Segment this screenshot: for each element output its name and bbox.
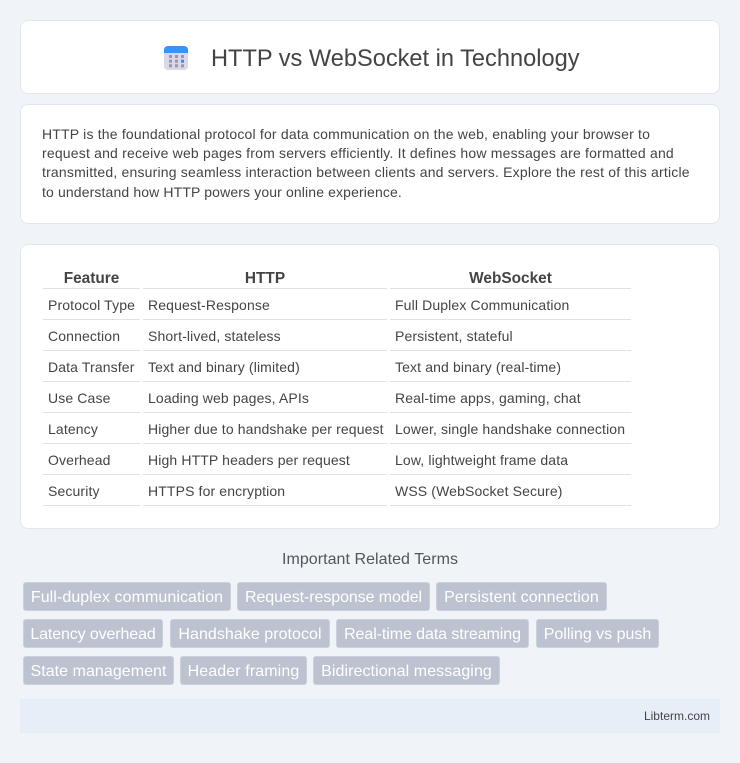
- tag list: related terms: Bidirectional messaging: [321, 663, 492, 680]
- text block: line 1: HTTP is the foundational protocol for data communication on the web, enabling your browser to: [42, 126, 650, 142]
- table row: latency: Lower, single handshake connection: [395, 421, 625, 437]
- table row: protocol type: Full Duplex Communication: [395, 297, 569, 313]
- table row: latency: Higher due to handshake per request: [148, 421, 384, 437]
- table row: use case: [48, 390, 581, 406]
- title: HTTP vs WebSocket in Technology: [211, 46, 580, 72]
- text block: line 2: request and receive web pages from servers efficiently. It defines how messages are formatted and: [42, 145, 674, 161]
- table row: connection: Connection: [48, 328, 120, 344]
- tag list: related terms: Request-response model: [245, 589, 422, 606]
- table row: data transfer: Data Transfer: [48, 359, 135, 375]
- tag list: related terms: Full-duplex communication: [31, 589, 223, 606]
- table row: connection: [48, 328, 513, 344]
- table row: overhead: [48, 452, 568, 468]
- table row: protocol type: Protocol Type: [48, 297, 135, 313]
- table row: protocol type: Request-Response: [148, 297, 270, 313]
- footer credit: Libterm.com: [644, 709, 710, 723]
- tag list: related terms: Persistent connection: [444, 589, 599, 606]
- table header: Feature: [64, 270, 119, 287]
- tag list: related terms: Polling vs push: [544, 626, 651, 643]
- tag list: related terms: Latency overhead: [30, 626, 156, 643]
- table header: HTTP: [245, 270, 285, 287]
- table row: data transfer: Text and binary (limited): [148, 359, 300, 375]
- table row: data transfer: [48, 359, 561, 375]
- table row: security: [48, 483, 563, 499]
- tag list: related terms: Real-time data streaming: [344, 626, 521, 643]
- table row: security: WSS (WebSocket Secure): [395, 483, 563, 499]
- footer bar: [20, 699, 720, 733]
- tag list: related terms: State management: [30, 663, 166, 680]
- table row: latency: Latency: [48, 421, 98, 437]
- panel: introduction text: [20, 104, 720, 224]
- table row: overhead: Low, lightweight frame data: [395, 452, 568, 468]
- icon: calendar grid: [164, 46, 188, 70]
- table row: overhead: High HTTP headers per request: [148, 452, 350, 468]
- table row: data transfer: Text and binary (real-time): [395, 359, 561, 375]
- panel: comparison table: [20, 244, 720, 529]
- table row: connection: Persistent, stateful: [395, 328, 513, 344]
- table row: overhead: Overhead: [48, 452, 111, 468]
- table row: security: HTTPS for encryption: [148, 483, 285, 499]
- tag list: related terms: Header framing: [188, 663, 299, 680]
- table header: [64, 270, 552, 287]
- table row: latency: [48, 421, 625, 437]
- heading: related terms: Important Related Terms: [282, 551, 458, 568]
- tag list: related terms: [23, 582, 659, 685]
- table row: use case: Real-time apps, gaming, chat: [395, 390, 581, 406]
- text block: line 3: transmitted, ensuring seamless interaction between clients and servers. Explore the rest of this article: [42, 164, 690, 180]
- tag list: related terms: Handshake protocol: [178, 626, 322, 643]
- table row: protocol type: [48, 297, 569, 313]
- table row: security: Security: [48, 483, 100, 499]
- table row: connection: Short-lived, stateless: [148, 328, 281, 344]
- table row: use case: Use Case: [48, 390, 111, 406]
- panel: header: [20, 20, 720, 94]
- table row: use case: Loading web pages, APIs: [148, 390, 309, 406]
- table header: WebSocket: [469, 270, 552, 287]
- text block: line 4: to understand how HTTP powers your online experience.: [42, 184, 402, 200]
